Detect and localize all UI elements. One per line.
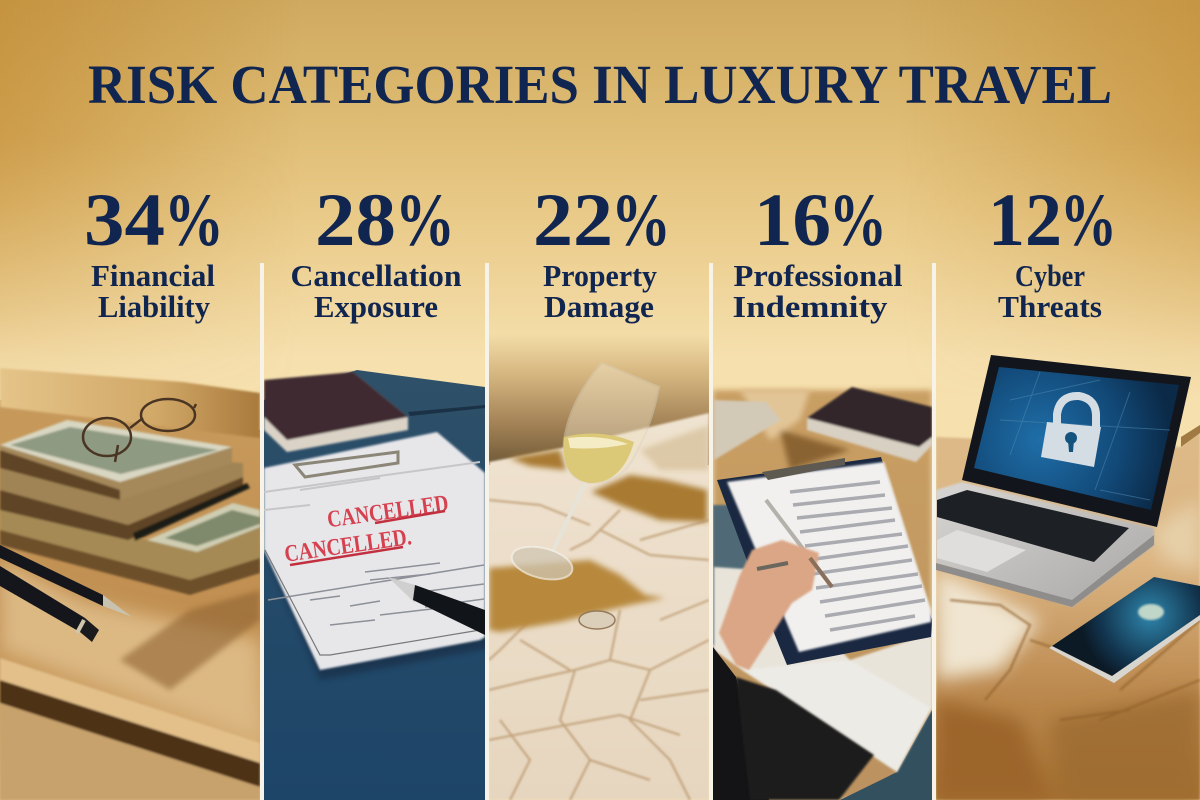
category: property damage: Property xyxy=(543,258,657,293)
category: financial liability: % xyxy=(164,179,224,262)
panel: financial liability photo xyxy=(0,368,260,800)
panel: professional indemnity photo xyxy=(713,387,932,800)
category: professional indemnity: Indemnity xyxy=(732,289,888,324)
category: cyber threats: Cyber xyxy=(1015,258,1085,293)
lock icon xyxy=(1041,396,1101,467)
stamp words: CANCELLED. xyxy=(283,524,413,568)
category: financial liability: Financial xyxy=(91,258,215,293)
marble stains xyxy=(509,425,709,522)
water drop xyxy=(579,611,615,629)
category: professional indemnity: Professional xyxy=(734,258,903,293)
category: property damage: % xyxy=(611,179,671,262)
category: financial liability xyxy=(84,179,224,324)
stamp words: CANCELLED xyxy=(326,491,450,533)
hand and pen xyxy=(719,500,832,670)
category: professional indemnity: 16 xyxy=(754,179,831,262)
marble veins xyxy=(489,500,709,800)
category: cyber threats: % xyxy=(1060,179,1117,262)
category: property damage: Damage xyxy=(544,289,654,324)
sleeve and wallet xyxy=(713,647,874,800)
notebook xyxy=(807,387,932,462)
pens xyxy=(0,545,132,642)
category: cancellation exposure xyxy=(290,179,462,324)
category: property damage xyxy=(533,179,671,324)
table edge xyxy=(0,658,260,800)
panel: cancellation exposure photo xyxy=(264,370,490,800)
document xyxy=(264,432,490,680)
category: cancellation exposure: Cancellation xyxy=(290,258,462,293)
desk marble highlights xyxy=(740,390,850,470)
laptop xyxy=(936,355,1191,607)
marble patches xyxy=(936,500,1200,800)
blue-grey desk area xyxy=(713,504,748,646)
category: property damage: 22 xyxy=(533,179,613,262)
money stacks xyxy=(0,420,260,595)
wine spill xyxy=(489,560,665,632)
category: professional indemnity: % xyxy=(829,179,887,262)
category: cyber threats xyxy=(988,179,1117,324)
marble veins xyxy=(950,600,1200,720)
dividers xyxy=(260,263,936,800)
category: cyber threats: 12 xyxy=(988,179,1062,262)
panel: cyber threats photo xyxy=(936,355,1200,800)
category: cancellation exposure: 28 xyxy=(315,179,396,262)
wooden board xyxy=(0,368,260,438)
small book xyxy=(714,400,781,460)
white papers xyxy=(714,567,932,772)
panel: property damage photo xyxy=(489,335,709,800)
category: financial liability: 34 xyxy=(84,179,165,262)
book xyxy=(264,372,408,452)
category: financial liability: Liability xyxy=(98,289,210,324)
phone xyxy=(1049,577,1200,683)
clipboard xyxy=(717,457,932,665)
stamp words xyxy=(285,496,448,566)
category: cancellation exposure: Exposure xyxy=(314,289,438,324)
category: cancellation exposure: % xyxy=(395,179,455,262)
wine glass xyxy=(508,363,659,585)
title: RISK CATEGORIES IN LUXURY TRAVEL xyxy=(88,54,1112,115)
glasses xyxy=(83,399,196,462)
pen xyxy=(388,577,485,635)
category: cyber threats: Threats xyxy=(998,289,1102,324)
category: professional indemnity xyxy=(732,179,903,324)
